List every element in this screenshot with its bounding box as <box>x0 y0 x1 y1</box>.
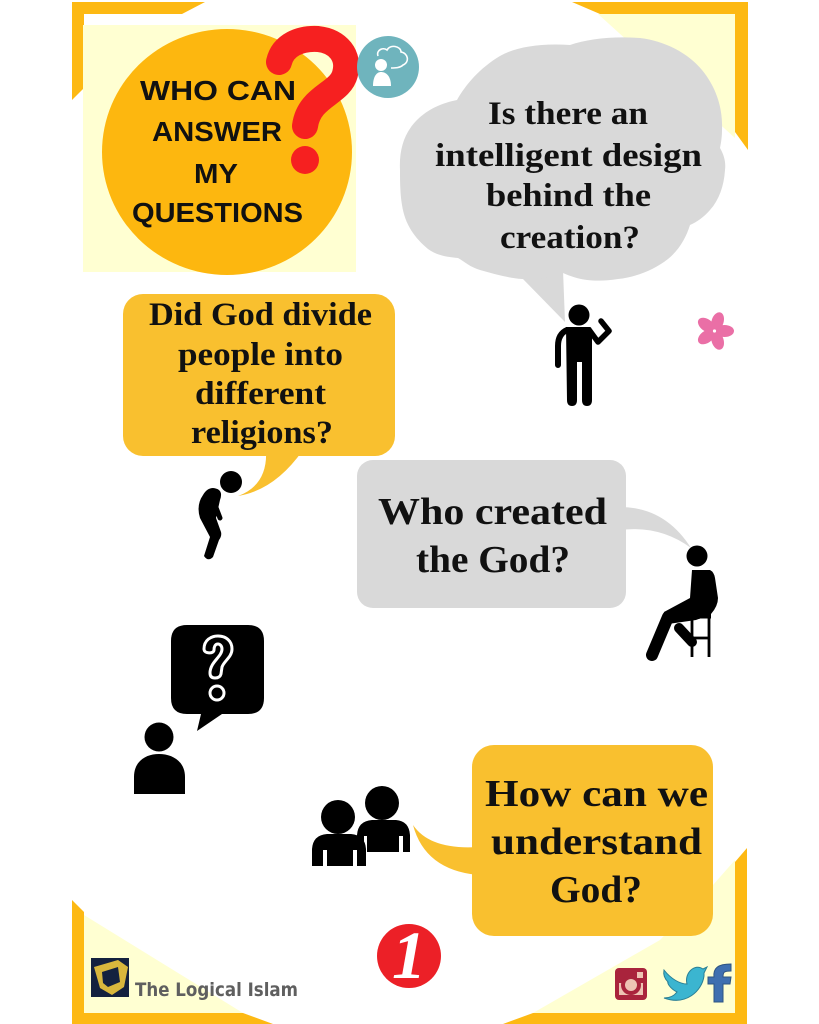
question text: the God? <box>416 539 570 581</box>
question text: creation? <box>500 220 640 256</box>
title text: MY <box>194 158 238 189</box>
corner frame: top right <box>572 2 748 150</box>
title panel <box>83 25 356 275</box>
icon: teal thinking person <box>357 36 419 98</box>
logo mark <box>91 958 129 997</box>
speech bubble: understand God <box>413 745 713 936</box>
corner frame: bottom left <box>72 900 273 1024</box>
title text: QUESTIONS <box>132 197 303 228</box>
icon: standing person <box>558 304 609 406</box>
title text: ANSWER <box>152 116 282 147</box>
black speech box <box>171 625 264 731</box>
question text: Is there an <box>488 96 648 132</box>
question text: Did God divide <box>149 297 372 333</box>
white question mark <box>204 636 232 700</box>
corner frame: top left <box>72 2 205 100</box>
question text: different <box>195 376 326 412</box>
question text: Who created <box>378 491 607 533</box>
question text <box>378 491 607 581</box>
icon: seated person on stool <box>652 546 718 657</box>
title text <box>132 75 303 228</box>
question text: understand <box>491 821 702 863</box>
speech bubble: who created God <box>357 460 691 608</box>
speech bubble: divide into religions <box>123 294 395 496</box>
question text <box>485 773 708 911</box>
title text: WHO CAN <box>140 75 296 106</box>
icon: facebook f <box>708 964 731 1002</box>
question text <box>149 297 372 451</box>
question text: behind the <box>486 178 651 214</box>
person silhouette <box>144 722 174 752</box>
icon: pink flower <box>695 311 734 351</box>
icon: person asking question <box>134 625 264 794</box>
speech bubble: intelligent design <box>400 37 725 322</box>
title circle <box>102 29 352 275</box>
question text: people into <box>178 337 343 373</box>
question text <box>435 96 702 256</box>
logo: The Logical Islam <box>91 958 298 1001</box>
icon: two people <box>312 786 410 866</box>
question text: intelligent design <box>435 138 702 174</box>
question text: How can we <box>485 773 708 815</box>
social icons <box>615 964 731 1002</box>
corner frame: bottom right <box>503 848 747 1024</box>
question text: religions? <box>191 415 333 451</box>
page number badge <box>377 917 441 993</box>
question text: God? <box>550 869 642 911</box>
icon: instagram <box>615 968 647 1000</box>
icon: red question mark <box>279 39 346 174</box>
page number badge: 1 <box>392 917 426 993</box>
icon: bent person <box>199 471 242 559</box>
logo text: The Logical Islam <box>135 979 298 1001</box>
icon: twitter bird <box>664 967 707 1000</box>
